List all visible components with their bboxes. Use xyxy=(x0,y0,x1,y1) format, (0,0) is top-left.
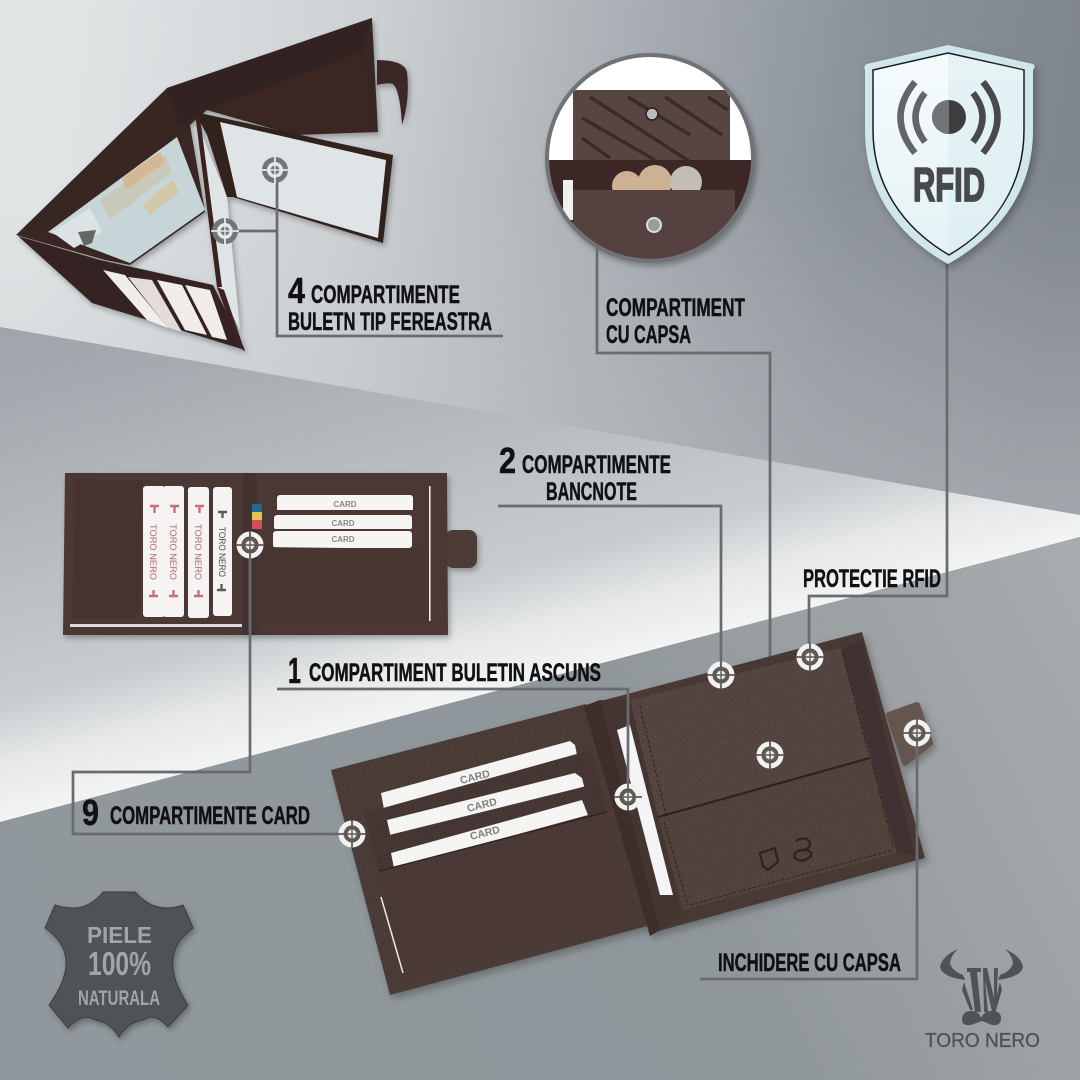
callout: protectie rfid xyxy=(803,260,947,657)
centre flap strip xyxy=(202,135,240,330)
right card pockets: CARD xyxy=(331,519,355,528)
card slots: TORO NERO xyxy=(167,524,178,580)
credit cards xyxy=(365,741,607,873)
wallet body xyxy=(63,473,448,635)
wallet photo: large open wallet bottom right xyxy=(331,632,930,995)
toro nero logo xyxy=(925,949,1040,1052)
circular detail: coin pocket xyxy=(547,55,755,270)
window flap xyxy=(195,112,393,243)
leather badge: NATURALA xyxy=(78,987,160,1010)
callout: 4 compartimente buletin: BULETN TIP FEREASTRA xyxy=(288,308,492,336)
callout: protectie rfid: PROTECTIE RFID xyxy=(803,565,941,593)
callout: inchidere cu capsa xyxy=(700,733,917,979)
pocket inner band xyxy=(548,160,752,192)
coin pocket flap xyxy=(573,90,730,160)
callout: inchidere cu capsa: INCHIDERE CU CAPSA xyxy=(718,949,901,977)
right card pockets: CARD xyxy=(331,535,355,544)
emblem xyxy=(760,838,811,870)
snap button xyxy=(647,218,661,232)
callout: 2 compartimente bancnote: BANCNOTE xyxy=(546,478,637,506)
lower pocket xyxy=(658,758,897,910)
signal waves xyxy=(900,82,998,153)
right card pockets: CARD xyxy=(333,500,357,509)
callout: 2 compartimente bancnote xyxy=(498,440,721,675)
callout: 1 compartiment buletin ascuns: COMPARTIMENT BULETIN ASCUNS xyxy=(309,659,601,687)
card panel with four cards xyxy=(18,236,245,350)
callout: 4 compartimente buletin xyxy=(211,156,503,336)
flag tag xyxy=(252,504,262,529)
bull head mark xyxy=(940,949,1023,1025)
background: lower panel xyxy=(0,537,1080,1080)
card slots: TORO NERO xyxy=(216,527,227,577)
left panel xyxy=(331,704,651,995)
wallet photo: open wallet top left xyxy=(16,18,408,352)
card slots xyxy=(143,486,232,618)
credit cards: CARD xyxy=(459,768,492,787)
credit cards: CARD xyxy=(466,796,499,815)
upper pocket xyxy=(630,648,870,817)
right panel xyxy=(597,632,925,932)
callout: 9 compartimente card: 9 xyxy=(82,792,99,833)
rfid shield icon xyxy=(864,45,1035,264)
callout: 9 compartimente card: COMPARTIMENTE CARD xyxy=(110,802,310,830)
toro nero logo: TORO NERO xyxy=(925,1030,1040,1052)
wallet photo: flat open wallet middle left xyxy=(63,473,477,635)
target markers xyxy=(236,531,931,848)
hidden id card xyxy=(617,725,673,895)
spine xyxy=(584,700,660,936)
signal dot xyxy=(932,100,966,134)
callout: 2 compartimente bancnote: 2 xyxy=(499,440,516,481)
card slots: TORO NERO xyxy=(192,524,203,580)
spine xyxy=(243,473,257,635)
callout: compartiment cu capsa: CU CAPSA xyxy=(606,321,691,349)
callout: 4 compartimente buletin: COMPARTIMENTE xyxy=(311,281,460,309)
callout: 9 compartimente card xyxy=(73,545,352,834)
rfid label: RFID xyxy=(913,158,985,211)
background: middle wedge xyxy=(0,327,1080,822)
leather badge: PIELE xyxy=(87,922,152,948)
right card pockets xyxy=(258,495,430,548)
coins xyxy=(612,165,702,190)
left pocket xyxy=(72,480,143,618)
credit cards: CARD xyxy=(469,824,502,843)
wallet back panel xyxy=(16,18,378,265)
wallet strap tab xyxy=(377,60,408,125)
callout: 1 compartiment buletin ascuns xyxy=(277,650,628,796)
id window xyxy=(48,137,205,263)
callout: 1 compartiment buletin ascuns: 1 xyxy=(288,650,301,691)
right pocket xyxy=(258,547,430,625)
wallet strap tab xyxy=(889,705,930,763)
leather badge xyxy=(45,892,193,1037)
callout: compartiment cu capsa: COMPARTIMENT xyxy=(606,294,745,322)
callout: 4 compartimente buletin: 4 xyxy=(288,270,305,311)
lower left pocket xyxy=(378,812,640,980)
card slots: TORO NERO xyxy=(147,524,158,580)
background: upper panel xyxy=(0,0,1080,540)
wallet strap tab xyxy=(445,530,477,568)
callout: 2 compartimente bancnote: COMPARTIMENTE xyxy=(522,451,671,479)
leather badge: 100% xyxy=(88,945,151,982)
callout: compartiment cu capsa xyxy=(597,248,770,755)
